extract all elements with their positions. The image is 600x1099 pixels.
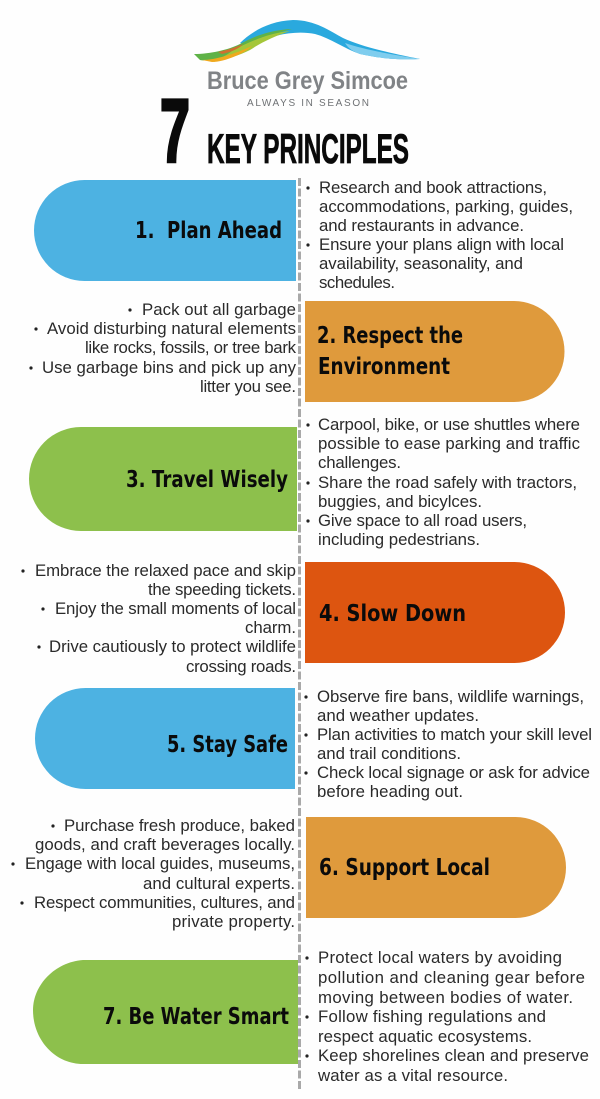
text block: environment tips: litter you see.: [200, 377, 296, 396]
pill: travel wisely: [29, 427, 297, 531]
principle 3: [29, 415, 580, 549]
text block: water tips: Keep shorelines clean and preserve: [318, 1046, 589, 1065]
text block: slow down tips: Embrace the relaxed pace and skip: [35, 561, 296, 580]
pill: support local: [306, 817, 566, 918]
text block: safety tips: Plan activities to match your skill level: [317, 725, 592, 744]
text block: water tips: [305, 948, 589, 1085]
principle 5: [35, 687, 592, 801]
text block: plan ahead tips: Research and book attractions,: [319, 178, 547, 197]
text block: water tips: moving between bodies of water.: [318, 988, 573, 1007]
text block: travel tips: [306, 415, 580, 549]
heading: travel wisely: 3. Travel Wisely: [126, 467, 288, 493]
logo wordmark: Bruce Grey Simcoe: [207, 67, 408, 95]
heading: slow down: 4. Slow Down: [319, 601, 466, 627]
text block: safety tips: [304, 687, 592, 801]
icon: brush swoosh: [194, 20, 420, 62]
principle 2: [29, 300, 564, 402]
pill: stay safe: [35, 688, 295, 789]
text block: environment tips: [29, 300, 297, 396]
text block: plan ahead tips: Ensure your plans align with local: [319, 235, 564, 254]
text block: environment tips: Pack out all garbage: [142, 300, 296, 319]
text block: plan ahead tips: schedules.: [319, 273, 395, 292]
text block: water tips: pollution and cleaning gear before: [318, 968, 585, 987]
text block: support local tips: Purchase fresh produce, baked: [64, 816, 295, 835]
text block: travel tips: possible to ease parking and traffic: [318, 434, 580, 453]
principle 4: [21, 561, 565, 676]
center dashed divider: [298, 178, 301, 1090]
text block: plan ahead tips: accommodations, parking, guides,: [319, 197, 573, 216]
text block: safety tips: and weather updates.: [317, 706, 479, 725]
heading: plan ahead: 1. Plan Ahead: [135, 218, 282, 244]
text block: travel tips: including pedestrians.: [318, 530, 480, 549]
text block: support local tips: [11, 816, 295, 931]
heading: support local: 6. Support Local: [319, 855, 490, 881]
text block: slow down tips: the speeding tickets.: [148, 580, 296, 599]
text block: support local tips: Respect communities, cultures, and: [34, 893, 295, 912]
text block: safety tips: Observe fire bans, wildlife warnings,: [317, 687, 584, 706]
text block: plan ahead tips: availability, seasonality, and: [319, 254, 523, 273]
heading: be water smart: 7. Be Water Smart: [103, 1004, 289, 1030]
text block: plan ahead tips: [306, 178, 573, 292]
text block: support local tips: and cultural experts.: [143, 874, 295, 893]
text block: slow down tips: Drive cautiously to protect wildlife: [49, 637, 296, 656]
principle 6: [11, 816, 566, 931]
text block: slow down tips: crossing roads.: [186, 657, 296, 676]
text block: safety tips: before heading out.: [317, 782, 463, 801]
text block: travel tips: challenges.: [318, 453, 401, 472]
pill: be water smart: [33, 960, 298, 1064]
heading: respect the environment: [317, 323, 463, 380]
title words: KEY PRINCIPLES: [207, 125, 409, 172]
text block: travel tips: Carpool, bike, or use shuttles where: [318, 415, 580, 434]
pill: plan ahead: [34, 180, 296, 281]
text block: support local tips: goods, and craft beverages locally.: [35, 835, 295, 854]
heading: stay safe: 5. Stay Safe: [167, 732, 288, 758]
text block: support local tips: Engage with local guides, museums,: [25, 854, 295, 873]
text block: plan ahead tips: and restaurants in advance.: [319, 216, 524, 235]
text block: water tips: Follow fishing regulations and: [318, 1007, 546, 1026]
logo tagline: ALWAYS IN SEASON: [247, 98, 369, 109]
principle 1: [34, 178, 573, 292]
pill: respect the environment: [305, 301, 564, 402]
principle 7: [33, 948, 589, 1085]
title numeral 7: 7: [160, 82, 190, 182]
text block: travel tips: buggies, and bicylces.: [318, 492, 482, 511]
text block: slow down tips: charm.: [245, 618, 296, 637]
text block: environment tips: Avoid disturbing natural elements: [47, 319, 296, 338]
text block: slow down tips: [21, 561, 296, 676]
text block: water tips: water as a vital resource.: [317, 1066, 508, 1085]
text block: safety tips: and trail conditions.: [317, 744, 461, 763]
heading: respect the environment: Environment: [318, 354, 450, 380]
text block: environment tips: like rocks, fossils, or tree bark: [85, 338, 297, 357]
pill: slow down: [305, 562, 565, 663]
text block: water tips: Protect local waters by avoiding: [318, 948, 562, 967]
text block: water tips: respect aquatic ecosystems.: [318, 1027, 532, 1046]
text block: slow down tips: Enjoy the small moments of local: [55, 599, 296, 618]
text block: support local tips: private property.: [172, 912, 295, 931]
text block: travel tips: Share the road safely with tractors,: [318, 473, 577, 492]
text block: environment tips: Use garbage bins and pick up any: [42, 358, 297, 377]
text block: travel tips: Give space to all road users,: [318, 511, 527, 530]
logo: Bruce Grey Simcoe: [194, 20, 420, 109]
text block: safety tips: Check local signage or ask for advice: [317, 763, 590, 782]
heading: respect the environment: 2. Respect the: [317, 323, 463, 349]
title: [160, 82, 409, 182]
